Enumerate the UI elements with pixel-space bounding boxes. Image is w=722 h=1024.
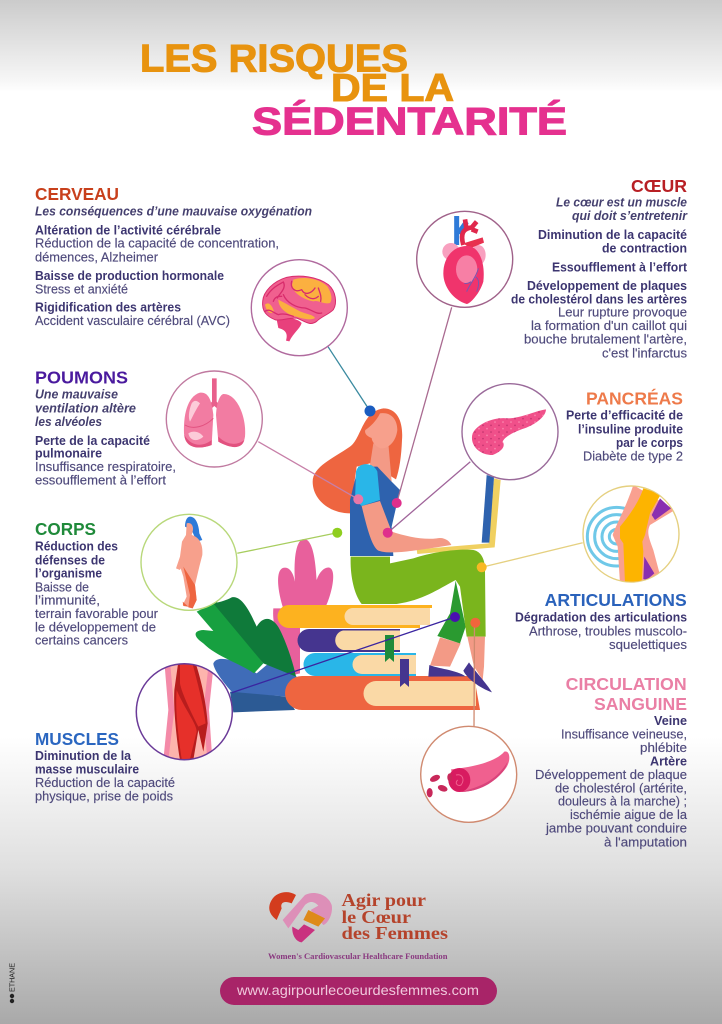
text block: circulation sanguine: ischémie aigue de la [570,808,687,822]
text block: corps: l’immunité, [35,593,100,607]
text block: coeur: qui doit s’entretenir [572,209,688,223]
laptop [417,475,501,554]
text block: corps: Baisse de [35,580,89,594]
text block: circulation sanguine: douleurs à la marche) ; [558,795,687,809]
text block: cerveau: Stress et anxiété [35,282,128,296]
connector lines [232,307,583,727]
text block: cerveau: CERVEAU [35,184,119,204]
text block: circulation sanguine: Développement de plaque [535,768,687,782]
text block: corps: le développement de [35,621,156,635]
text block: poumons: Perte de la capacité [35,434,150,448]
text block: coeur: de cholestérol dans les artères [511,292,687,306]
text block: circulation sanguine: à l'amputation [604,836,687,850]
text block: circulation sanguine: phlébite [640,741,687,755]
text block: pancreas: Perte d’efficacité de [566,409,683,423]
text block: cerveau: Altération de l’activité cérébrale [35,223,221,237]
text block: circulation sanguine: Insuffisance veineuse, [561,727,687,741]
neck [370,443,392,482]
text block: coeur: Développement de plaques [527,279,687,293]
text block: circulation sanguine: jambe pouvant conduire [545,822,687,836]
text block: coeur: CŒUR [631,176,687,196]
foundation tagline: Women's Cardiovascular Healthcare Foundation [268,952,448,961]
logo: heart mark [269,892,332,942]
icon: lungs [166,371,262,467]
credit: ethane: ETHANE [10,963,16,992]
plant: blue leaves [213,659,297,712]
text block: articulations: ARTICULATIONS [545,590,687,610]
text block: corps: Réduction des [35,540,118,554]
icon: muscle [136,662,232,760]
title: DE LA [331,67,454,110]
text block: poumons: POUMONS [35,367,128,387]
bookmark: green [385,635,394,662]
title: LES RISQUES [140,38,408,80]
logo: wordmark [342,890,448,943]
text block: muscles: Diminution de la [35,749,132,763]
logo: wordmark: le Cœur [342,907,411,927]
icon: brain [251,260,347,356]
text block: cerveau: Accident vasculaire cérébral (AVC) [35,314,230,328]
bookmark: navy [400,659,409,687]
text block: corps: défenses de [35,553,105,567]
text block: circulation sanguine: Veine [654,714,687,728]
text block: corps: l’organisme [35,567,102,581]
book 4 [285,676,480,710]
plant: green leaves [196,597,296,677]
text block: corps [35,519,158,648]
text block: coeur: c'est l'infarctus [602,346,687,360]
front calf [467,637,485,680]
website pill: www.agirpourlecoeurdesfemmes.com [236,983,479,998]
text block: pancreas: l’insuline produite [578,422,683,436]
text block: cerveau [35,184,312,328]
text block: circulation sanguine: SANGUINE [594,694,687,714]
book 2 [298,629,400,652]
text block: corps: certains cancers [35,634,128,648]
text block: circulation sanguine: CIRCULATION [566,674,687,694]
book 1 [278,605,432,628]
text block: cerveau: Réduction de la capacité de concentration, [35,237,279,251]
text block: articulations: Arthrose, troubles muscolo- [529,624,687,638]
illustration: stack of books [278,605,480,710]
text block: circulation sanguine: Artère [650,754,687,768]
text block: circulation sanguine: de cholestérol (artérite, [555,781,687,795]
text block: poumons: Une mauvaise [35,388,118,402]
text block: cerveau: Les conséquences d’une mauvaise oxygénation [35,204,312,218]
text block: poumons: les alvéoles [35,415,102,429]
text block: pancreas [566,387,683,463]
text block: articulations [515,590,687,652]
text block: muscles [35,729,175,804]
text block: coeur: bouche brutalement l'artère, [524,332,687,346]
text block: articulations: squelettiques [609,638,687,652]
text block: muscles: Réduction de la capacité [35,776,175,790]
text block: coeur: Leur rupture provoque [558,306,687,320]
text block: coeur: Essoufflement à l’effort [552,260,688,274]
arm [362,501,451,552]
title [140,38,567,144]
text block: coeur: Diminution de la capacité [538,228,687,242]
text block: poumons: ventilation altère [35,401,136,415]
logo: wordmark: Agir pour [342,890,426,910]
text block: poumons: pulmonaire [35,447,102,461]
website pill [220,977,497,1005]
text block: corps: CORPS [35,519,96,539]
text block: poumons: Insuffisance respiratoire, [35,460,176,474]
sleeve [355,464,380,506]
text block: muscles: masse musculaire [35,762,139,776]
trousers [351,550,486,637]
plant: pink leaves [273,539,333,675]
text block: pancreas: par le corps [616,436,683,450]
back leg [430,581,466,667]
text block: cerveau: Rigidification des artères [35,301,181,315]
text block: cerveau: Baisse de production hormonale [35,269,224,283]
anatomical location dots [332,406,487,628]
icon: heart [417,211,513,307]
hair [313,408,402,513]
text block: circulation sanguine [535,674,687,850]
top [350,467,400,556]
text block: poumons: essoufflement à l’effort [35,473,167,487]
text block: coeur: de contraction [602,241,687,255]
text block: pancreas: Diabète de type 2 [583,449,683,463]
text block: coeur [511,176,688,360]
text block: corps: terrain favorable pour [35,607,158,621]
book 3 [304,653,416,676]
icon: artery [421,726,517,822]
shoes [428,662,492,692]
icon: pancreas [462,384,558,480]
illustration: woman sitting at a laptop [313,408,501,692]
icon: body silhouette [141,514,237,610]
text block: coeur: Le cœur est un muscle [556,196,687,210]
logo: wordmark: des Femmes [342,923,448,943]
face [365,413,397,448]
text block: articulations: Dégradation des articulations [515,611,687,625]
text block: muscles: physique, prise de poids [35,790,173,804]
text block: cerveau: démences, Alzheimer [35,250,158,264]
text block: pancreas: PANCRÉAS [586,387,683,408]
text block: muscles: MUSCLES [35,729,119,749]
icon: knee joint [583,485,679,583]
text block: poumons [35,367,176,487]
illustration: plants [196,539,333,712]
text block: coeur: la formation d'un caillot qui [531,319,687,333]
title: SÉDENTARITÉ [252,100,567,144]
